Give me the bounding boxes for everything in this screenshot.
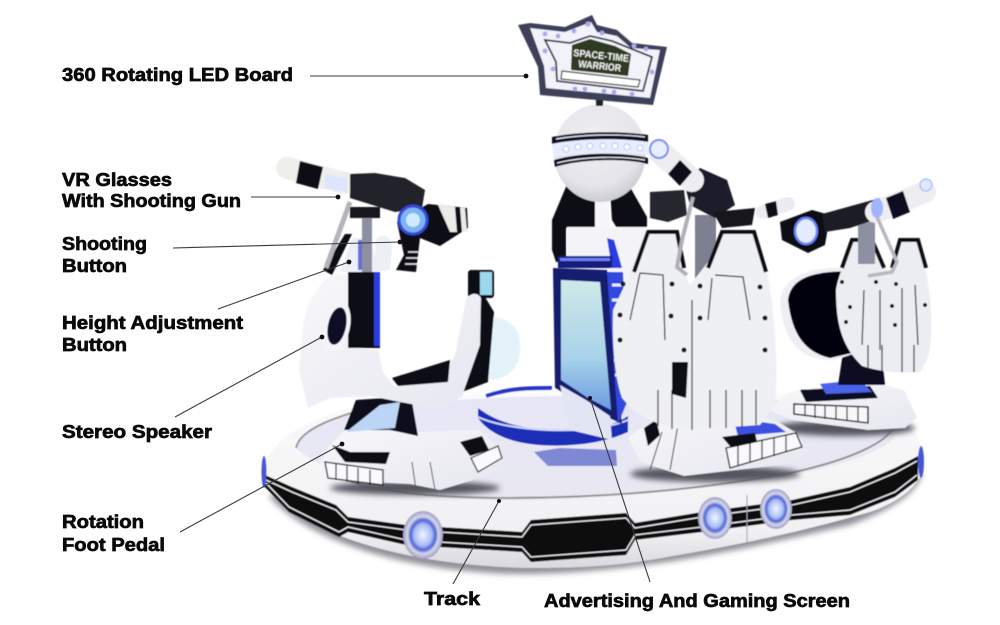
seat column [348, 272, 380, 348]
left seat [287, 161, 520, 410]
label: Rotation Foot Pedal: Rotation [62, 512, 144, 532]
seam [746, 495, 748, 543]
label: Track: Track [424, 589, 481, 609]
front right pedestal [670, 398, 751, 427]
front right gun body [684, 168, 735, 218]
band stripes [266, 461, 917, 537]
side lights [262, 456, 266, 488]
front right gun barrel [660, 152, 692, 180]
sphere [554, 104, 646, 202]
base light 3 [760, 489, 792, 529]
far gun ring [780, 210, 830, 253]
support rod [326, 202, 350, 268]
hand gun [396, 204, 468, 272]
leader: shooting button [173, 240, 402, 248]
far gun barrel [876, 192, 925, 212]
leader: LED board [310, 74, 528, 78]
far seat backs [836, 238, 932, 373]
label: Height Adjustment Button: Button [62, 335, 127, 355]
far right pod and seat [769, 179, 932, 436]
leader: gaming screen [588, 396, 650, 582]
front right pod and seat [613, 140, 810, 482]
label: Stereo Speaker: Stereo Speaker [62, 422, 212, 442]
label: Shooting Button [62, 234, 147, 276]
machine illustration [262, 15, 932, 574]
leader: track [453, 499, 501, 584]
label: Shooting Button: Button [62, 256, 127, 276]
tower collar [567, 227, 647, 292]
centre tower [478, 100, 648, 466]
base platform [262, 388, 924, 574]
front right gun back plate [650, 190, 687, 222]
screen base panel [560, 385, 612, 440]
label: Height Adjustment Button [62, 313, 243, 355]
screen column [553, 268, 622, 424]
far gun rod [868, 217, 897, 276]
leader: VR glasses [251, 195, 340, 199]
label: Rotation Foot Pedal: Foot Pedal [62, 535, 165, 555]
LED board [518, 15, 667, 105]
leader: stereo speaker [175, 335, 324, 417]
seat headrest cushion [484, 318, 520, 380]
label: VR Glasses With Shooting Gun: With Shooting Gun [62, 191, 241, 211]
label: Advertising And Gaming Screen: Advertising And Gaming Screen [544, 591, 850, 611]
leader: height adjustment [218, 260, 351, 309]
label: Shooting Button: Shooting [62, 234, 147, 254]
VR body [350, 173, 425, 212]
black band [265, 456, 918, 562]
far seat cushion [780, 268, 865, 360]
tower legs [552, 182, 595, 262]
track rail [296, 408, 895, 498]
seat rods behind [695, 215, 716, 285]
leader: foot pedal [180, 442, 344, 532]
stereo speaker [317, 298, 355, 354]
small rear gun [763, 204, 788, 212]
label: Rotation Foot Pedal [62, 512, 165, 555]
board title: SPACE-TIME [573, 48, 630, 65]
blue ring [478, 408, 628, 446]
base light 1 [403, 511, 443, 559]
label: VR Glasses With Shooting Gun: VR Glasses [62, 170, 172, 190]
tower foot [534, 448, 617, 466]
platform top surface [296, 396, 895, 501]
label: Height Adjustment Button: Height Adjustment [62, 313, 243, 333]
front right gun rod [677, 197, 693, 275]
sphere LED bands [552, 132, 648, 144]
seat screen [468, 270, 494, 298]
base light 2 [698, 497, 732, 539]
VR gun barrel [287, 168, 345, 183]
label: VR Glasses With Shooting Gun [62, 170, 241, 211]
far gun column [858, 222, 875, 264]
far gun body [822, 198, 886, 232]
board subtitle: WARRIOR [578, 59, 622, 75]
label: 360 Rotating LED Board: 360 Rotating LED Board [62, 65, 293, 85]
front right seat backs [613, 232, 690, 430]
left pod [320, 398, 502, 495]
